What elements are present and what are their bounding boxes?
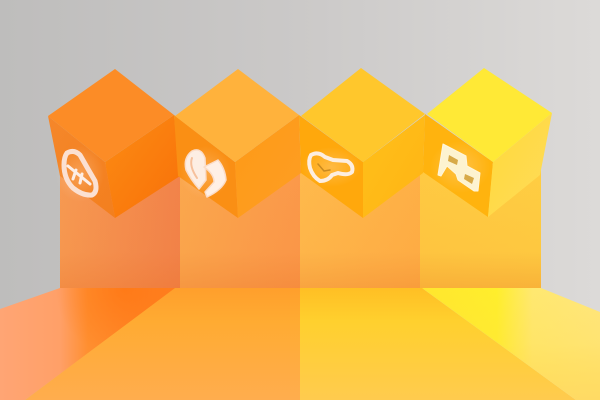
icon: link <box>179 146 231 198</box>
icon: flag <box>430 141 490 193</box>
cube 1 <box>48 69 180 218</box>
panel: back wall columns <box>60 165 541 289</box>
cube 3 <box>299 68 425 218</box>
cube 2 <box>174 69 301 218</box>
panel: floor <box>0 288 600 400</box>
icon: key <box>301 147 361 187</box>
cube 4 <box>423 68 552 217</box>
icon: lock <box>56 146 104 202</box>
